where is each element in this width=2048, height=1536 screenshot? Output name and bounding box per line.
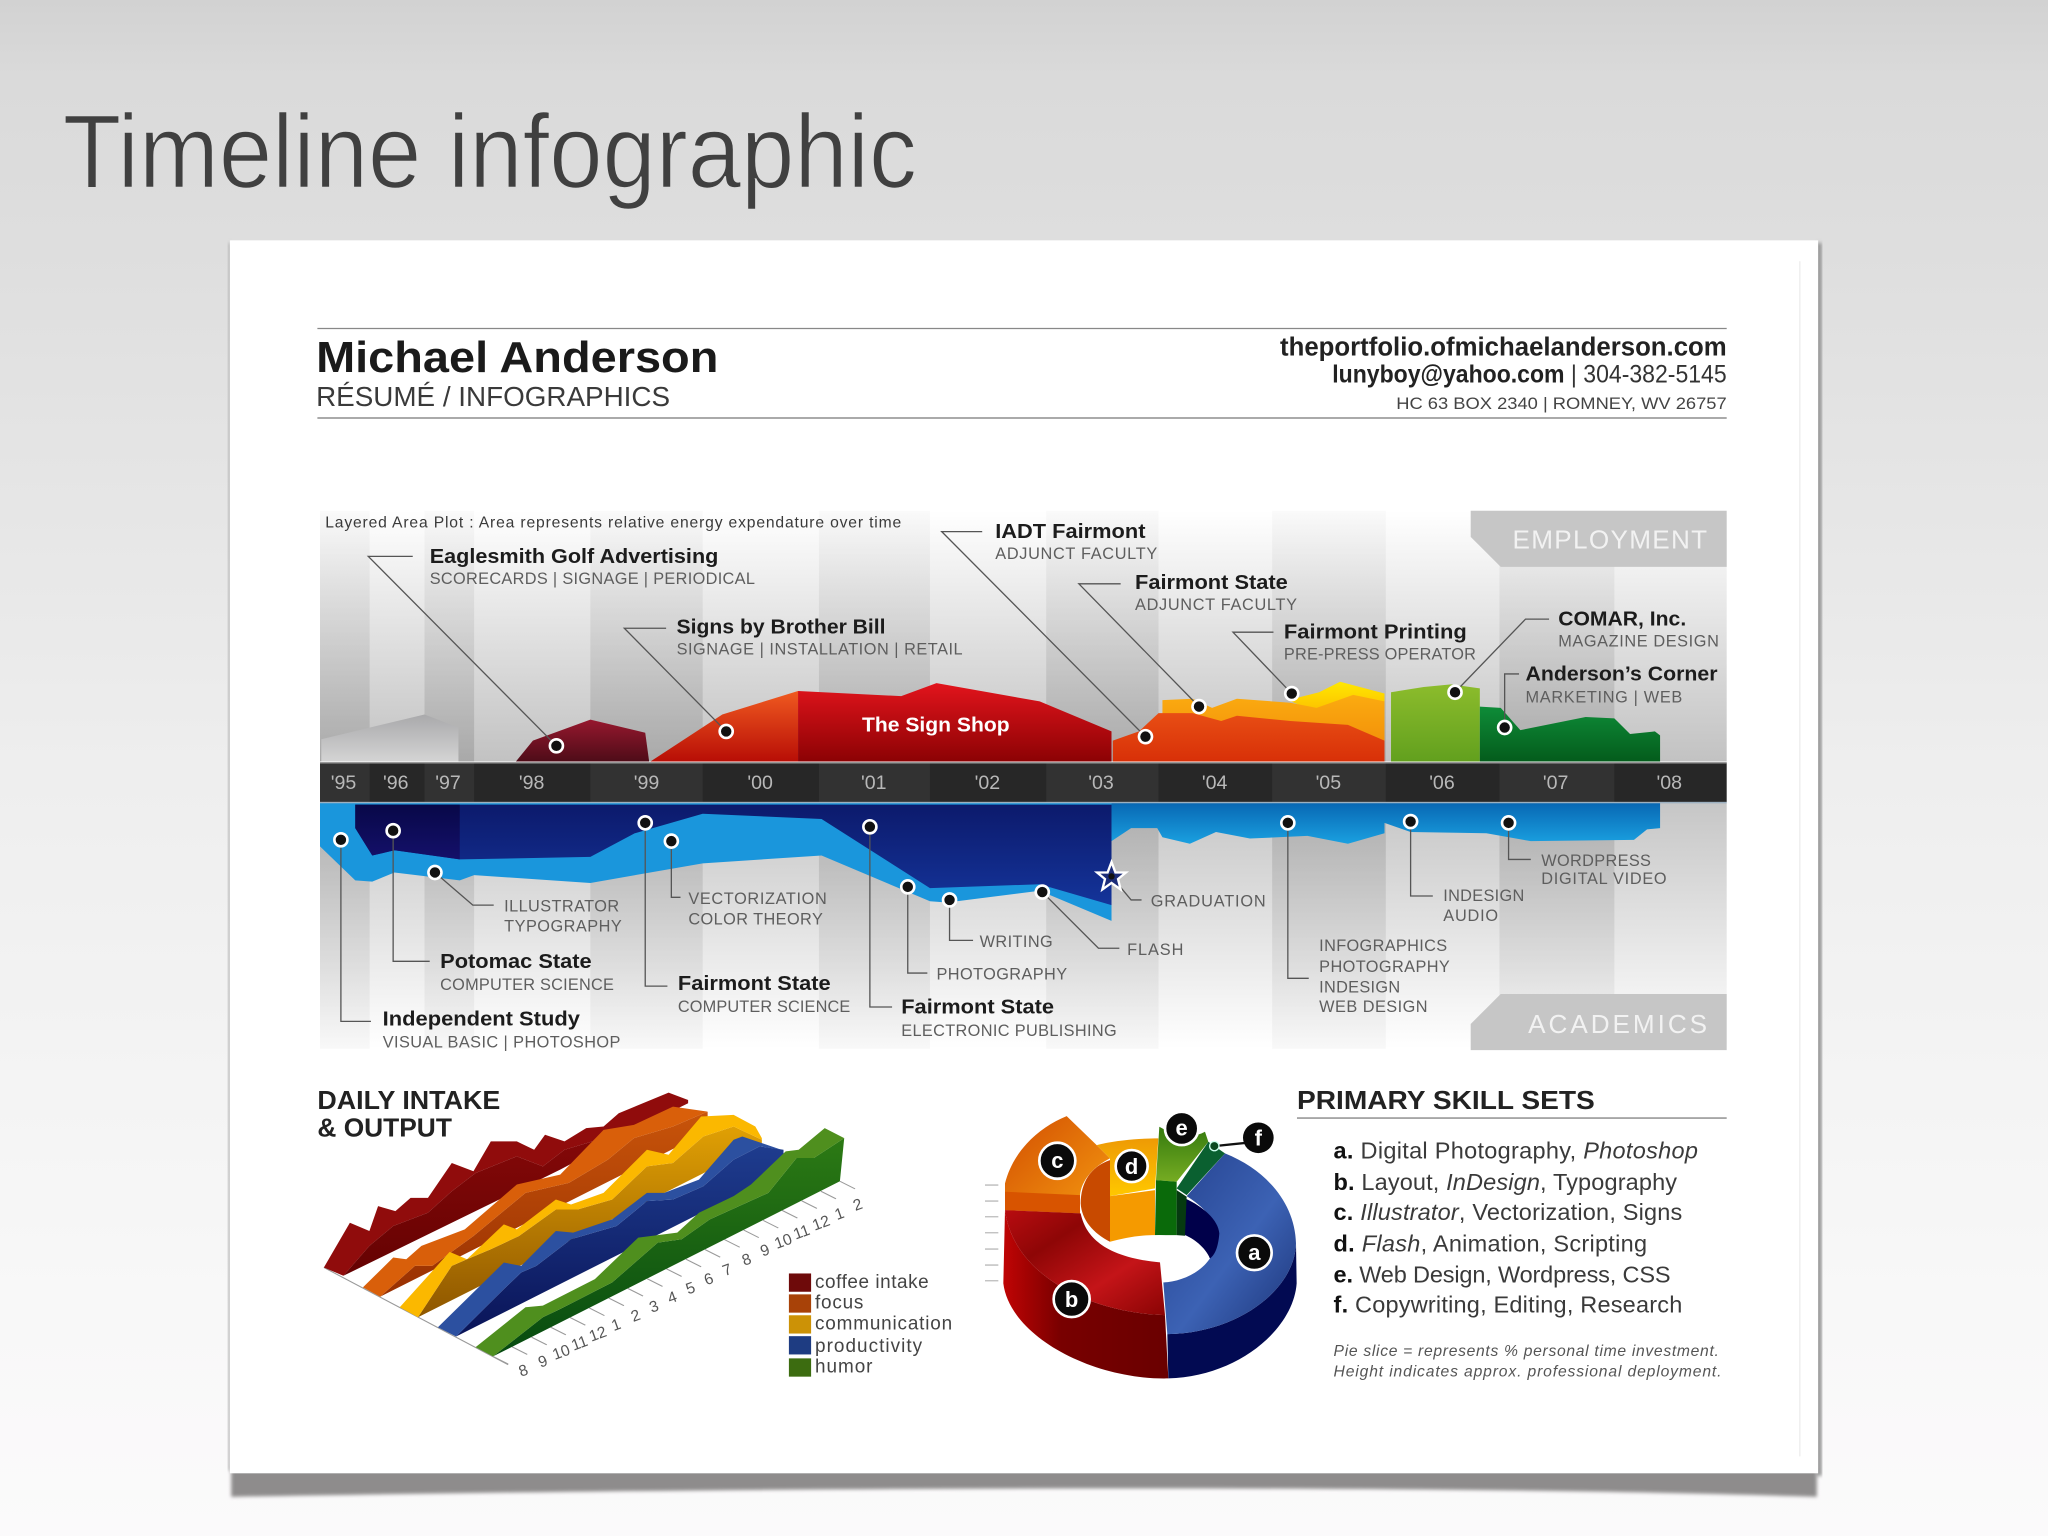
hour labels: 1 (609, 1316, 623, 1335)
header: name and contact: lunyboy@yahoo.com | 304-382-5145 (1332, 362, 1727, 389)
tag: employment (1471, 511, 1727, 567)
chart: 3D ribbon chart (324, 1093, 865, 1381)
tag: employment: EMPLOYMENT (1512, 525, 1707, 555)
hour labels: 9 (536, 1352, 550, 1371)
hour labels: 8 (740, 1251, 754, 1270)
label e (1165, 1112, 1198, 1145)
ribbons (324, 1093, 844, 1356)
chart legend: productivity (815, 1336, 923, 1357)
panel: layered area plot (320, 511, 1727, 1052)
label b: b (1065, 1287, 1078, 1312)
hour labels: 6 (702, 1270, 716, 1289)
hour labels (517, 1196, 865, 1381)
year axis bar: '98 (519, 772, 544, 794)
label c: c (1051, 1148, 1063, 1173)
series: communication (400, 1115, 762, 1317)
label a (1237, 1235, 1272, 1270)
series: focus (363, 1107, 708, 1297)
employment labels: SIGNAGE | INSTALLATION | RETAIL (677, 640, 963, 658)
employment labels: Fairmont Printing (1284, 622, 1467, 644)
label a: a (1248, 1240, 1261, 1265)
employment labels: COMAR, Inc. (1558, 609, 1686, 631)
employment labels: Anderson’s Corner (1526, 663, 1718, 685)
year axis bar: '97 (435, 772, 461, 794)
hour labels: 2 (629, 1307, 643, 1326)
hour labels: 1 (833, 1205, 847, 1224)
chart legend (789, 1272, 952, 1378)
header: name and contact: HC 63 BOX 2340 | ROMNEY, WV 26757 (1396, 394, 1727, 413)
tag: academics (1471, 994, 1727, 1050)
series: productivity (438, 1136, 784, 1337)
employment labels: Signs by Brother Bill (677, 616, 886, 638)
year axis bar: '95 (331, 772, 356, 794)
academics labels: WORDPRESS (1541, 852, 1651, 870)
slice d (1097, 1138, 1158, 1242)
series: humor (476, 1128, 844, 1356)
hour labels: 7 (720, 1261, 734, 1280)
heading: daily intake and output (317, 1087, 500, 1142)
plot background with year bands (320, 511, 1727, 1049)
donut footnote: Height indicates approx. professional deployment. (1334, 1364, 1721, 1381)
hour labels: 5 (684, 1279, 698, 1298)
hour labels: 4 (665, 1288, 680, 1307)
slide title: Timeline infographic (63, 93, 917, 210)
hour labels: 8 (517, 1362, 531, 1381)
donut footnote: Pie slice = represents % personal time investment. (1334, 1343, 1719, 1360)
tag: academics: ACADEMICS (1528, 1009, 1707, 1039)
plot caption: Layered Area Plot : Area represents relative energy expendature over time (325, 515, 902, 532)
label e: e (1176, 1115, 1188, 1140)
label f (1210, 1122, 1274, 1153)
donut footnote (1334, 1343, 1721, 1381)
academics labels: VISUAL BASIC | PHOTOSHOP (383, 1034, 621, 1052)
header: name and contact (316, 328, 1727, 418)
academics labels: ILLUSTRATOR (504, 898, 619, 916)
employment labels (430, 521, 1719, 707)
year axis bar: '04 (1202, 772, 1228, 794)
label f: f (1255, 1125, 1263, 1150)
leader lines (341, 532, 1549, 1021)
employment labels: MAGAZINE DESIGN (1558, 633, 1719, 651)
label b (1054, 1281, 1090, 1317)
slice e (1155, 1127, 1208, 1235)
header: name and contact: RÉSUMÉ / INFOGRAPHICS (316, 381, 670, 412)
employment labels: ADJUNCT FACULTY (1135, 596, 1297, 614)
axis ticks (324, 1181, 855, 1365)
academics labels: Independent Study (383, 1008, 581, 1030)
academics labels: INDESIGN (1443, 887, 1524, 905)
academics labels: Potomac State (440, 951, 592, 973)
academics labels: COMPUTER SCIENCE (440, 976, 614, 994)
label c (1039, 1143, 1075, 1179)
chart: 3D donut of skill sets (985, 1112, 1297, 1378)
year axis bar: '01 (861, 772, 887, 794)
academics labels: AUDIO (1443, 907, 1498, 925)
academics labels: WRITING (980, 933, 1053, 951)
heading: daily intake and output: DAILY INTAKE (317, 1087, 500, 1115)
academics labels: Fairmont State (678, 973, 831, 995)
slice f (1177, 1142, 1225, 1236)
header: name and contact: Michael Anderson (316, 334, 718, 382)
chart legend: focus (815, 1293, 863, 1314)
year axis bar: '02 (975, 772, 1000, 794)
employment labels: MARKETING | WEB (1526, 689, 1682, 707)
hour labels: 2 (851, 1196, 865, 1215)
heading: daily intake and output: & OUTPUT (317, 1114, 452, 1142)
skill list: d. Flash, Animation, Scripting (1334, 1230, 1647, 1256)
employment labels: ADJUNCT FACULTY (995, 545, 1157, 563)
employment labels: IADT Fairmont (995, 521, 1146, 543)
heading: primary skill sets: PRIMARY SKILL SETS (1297, 1085, 1595, 1115)
academics labels: GRADUATION (1151, 892, 1266, 910)
academics labels: TYPOGRAPHY (504, 917, 622, 935)
label d: d (1125, 1154, 1138, 1179)
company name inside area: The Sign Shop (862, 714, 1010, 736)
hour labels: 11 (569, 1333, 590, 1354)
academics labels: PHOTOGRAPHY (936, 966, 1067, 984)
chart legend: humor (815, 1357, 872, 1378)
year axis bar: '00 (747, 772, 773, 794)
header: name and contact: theportfolio.ofmichaelanderson.com (1280, 333, 1727, 361)
academics areas (320, 803, 1660, 921)
hour labels: 12 (587, 1324, 609, 1346)
academics labels: FLASH (1127, 941, 1183, 959)
academics labels: INDESIGN (1319, 979, 1400, 997)
chart legend: communication (815, 1314, 952, 1335)
year axis bar (320, 763, 1727, 803)
year axis bar: '07 (1543, 772, 1568, 794)
academics labels: VECTORIZATION (688, 890, 827, 908)
employment labels: SCORECARDS | SIGNAGE | PERIODICAL (430, 570, 755, 588)
employment labels: Eaglesmith Golf Advertising (430, 546, 718, 568)
skill list: a. Digital Photography, Photoshop (1334, 1138, 1698, 1164)
academics labels: Fairmont State (901, 997, 1054, 1019)
hour labels: 11 (791, 1222, 812, 1243)
height ticks (985, 1185, 998, 1281)
panel: resume sheet (228, 240, 1822, 1497)
academics labels (383, 852, 1667, 1052)
academics labels: COLOR THEORY (688, 911, 823, 929)
year axis bar: '06 (1429, 772, 1455, 794)
slice a (1163, 1153, 1297, 1378)
hour labels: 3 (647, 1298, 661, 1317)
timeline markers (334, 686, 1515, 906)
year axis bar: '03 (1088, 772, 1114, 794)
academics labels: COMPUTER SCIENCE (678, 998, 850, 1016)
employment areas (321, 682, 1660, 761)
academics labels: WEB DESIGN (1319, 998, 1428, 1016)
year axis bar: '05 (1316, 772, 1341, 794)
hour labels: 12 (810, 1213, 832, 1234)
employment labels: Fairmont State (1135, 572, 1288, 594)
skill list: b. Layout, InDesign, Typography (1334, 1169, 1677, 1195)
skill list: f. Copywriting, Editing, Research (1334, 1292, 1682, 1318)
skill list: c. Illustrator, Vectorization, Signs (1334, 1199, 1682, 1225)
hour labels: 10 (550, 1342, 573, 1364)
year axis bar: '96 (383, 772, 409, 794)
slice b (1003, 1210, 1168, 1378)
hour labels: 9 (758, 1241, 772, 1260)
skill list (1334, 1138, 1698, 1318)
academics labels: INFOGRAPHICS (1319, 937, 1447, 955)
chart legend: coffee intake (815, 1272, 929, 1293)
label d (1116, 1150, 1148, 1182)
slice c (1005, 1116, 1110, 1242)
academics labels: DIGITAL VIDEO (1541, 870, 1667, 888)
donut hole (1103, 1235, 1210, 1282)
academics labels: PHOTOGRAPHY (1319, 958, 1450, 976)
employment labels: PRE-PRESS OPERATOR (1284, 646, 1476, 664)
hour labels: 10 (772, 1231, 795, 1253)
skill list: e. Web Design, Wordpress, CSS (1334, 1262, 1671, 1288)
year axis bar: '08 (1656, 772, 1682, 794)
year axis bar: '99 (634, 772, 659, 794)
icon: graduation star (1097, 862, 1126, 889)
series: coffee intake (324, 1093, 688, 1276)
academics labels: ELECTRONIC PUBLISHING (901, 1022, 1117, 1040)
